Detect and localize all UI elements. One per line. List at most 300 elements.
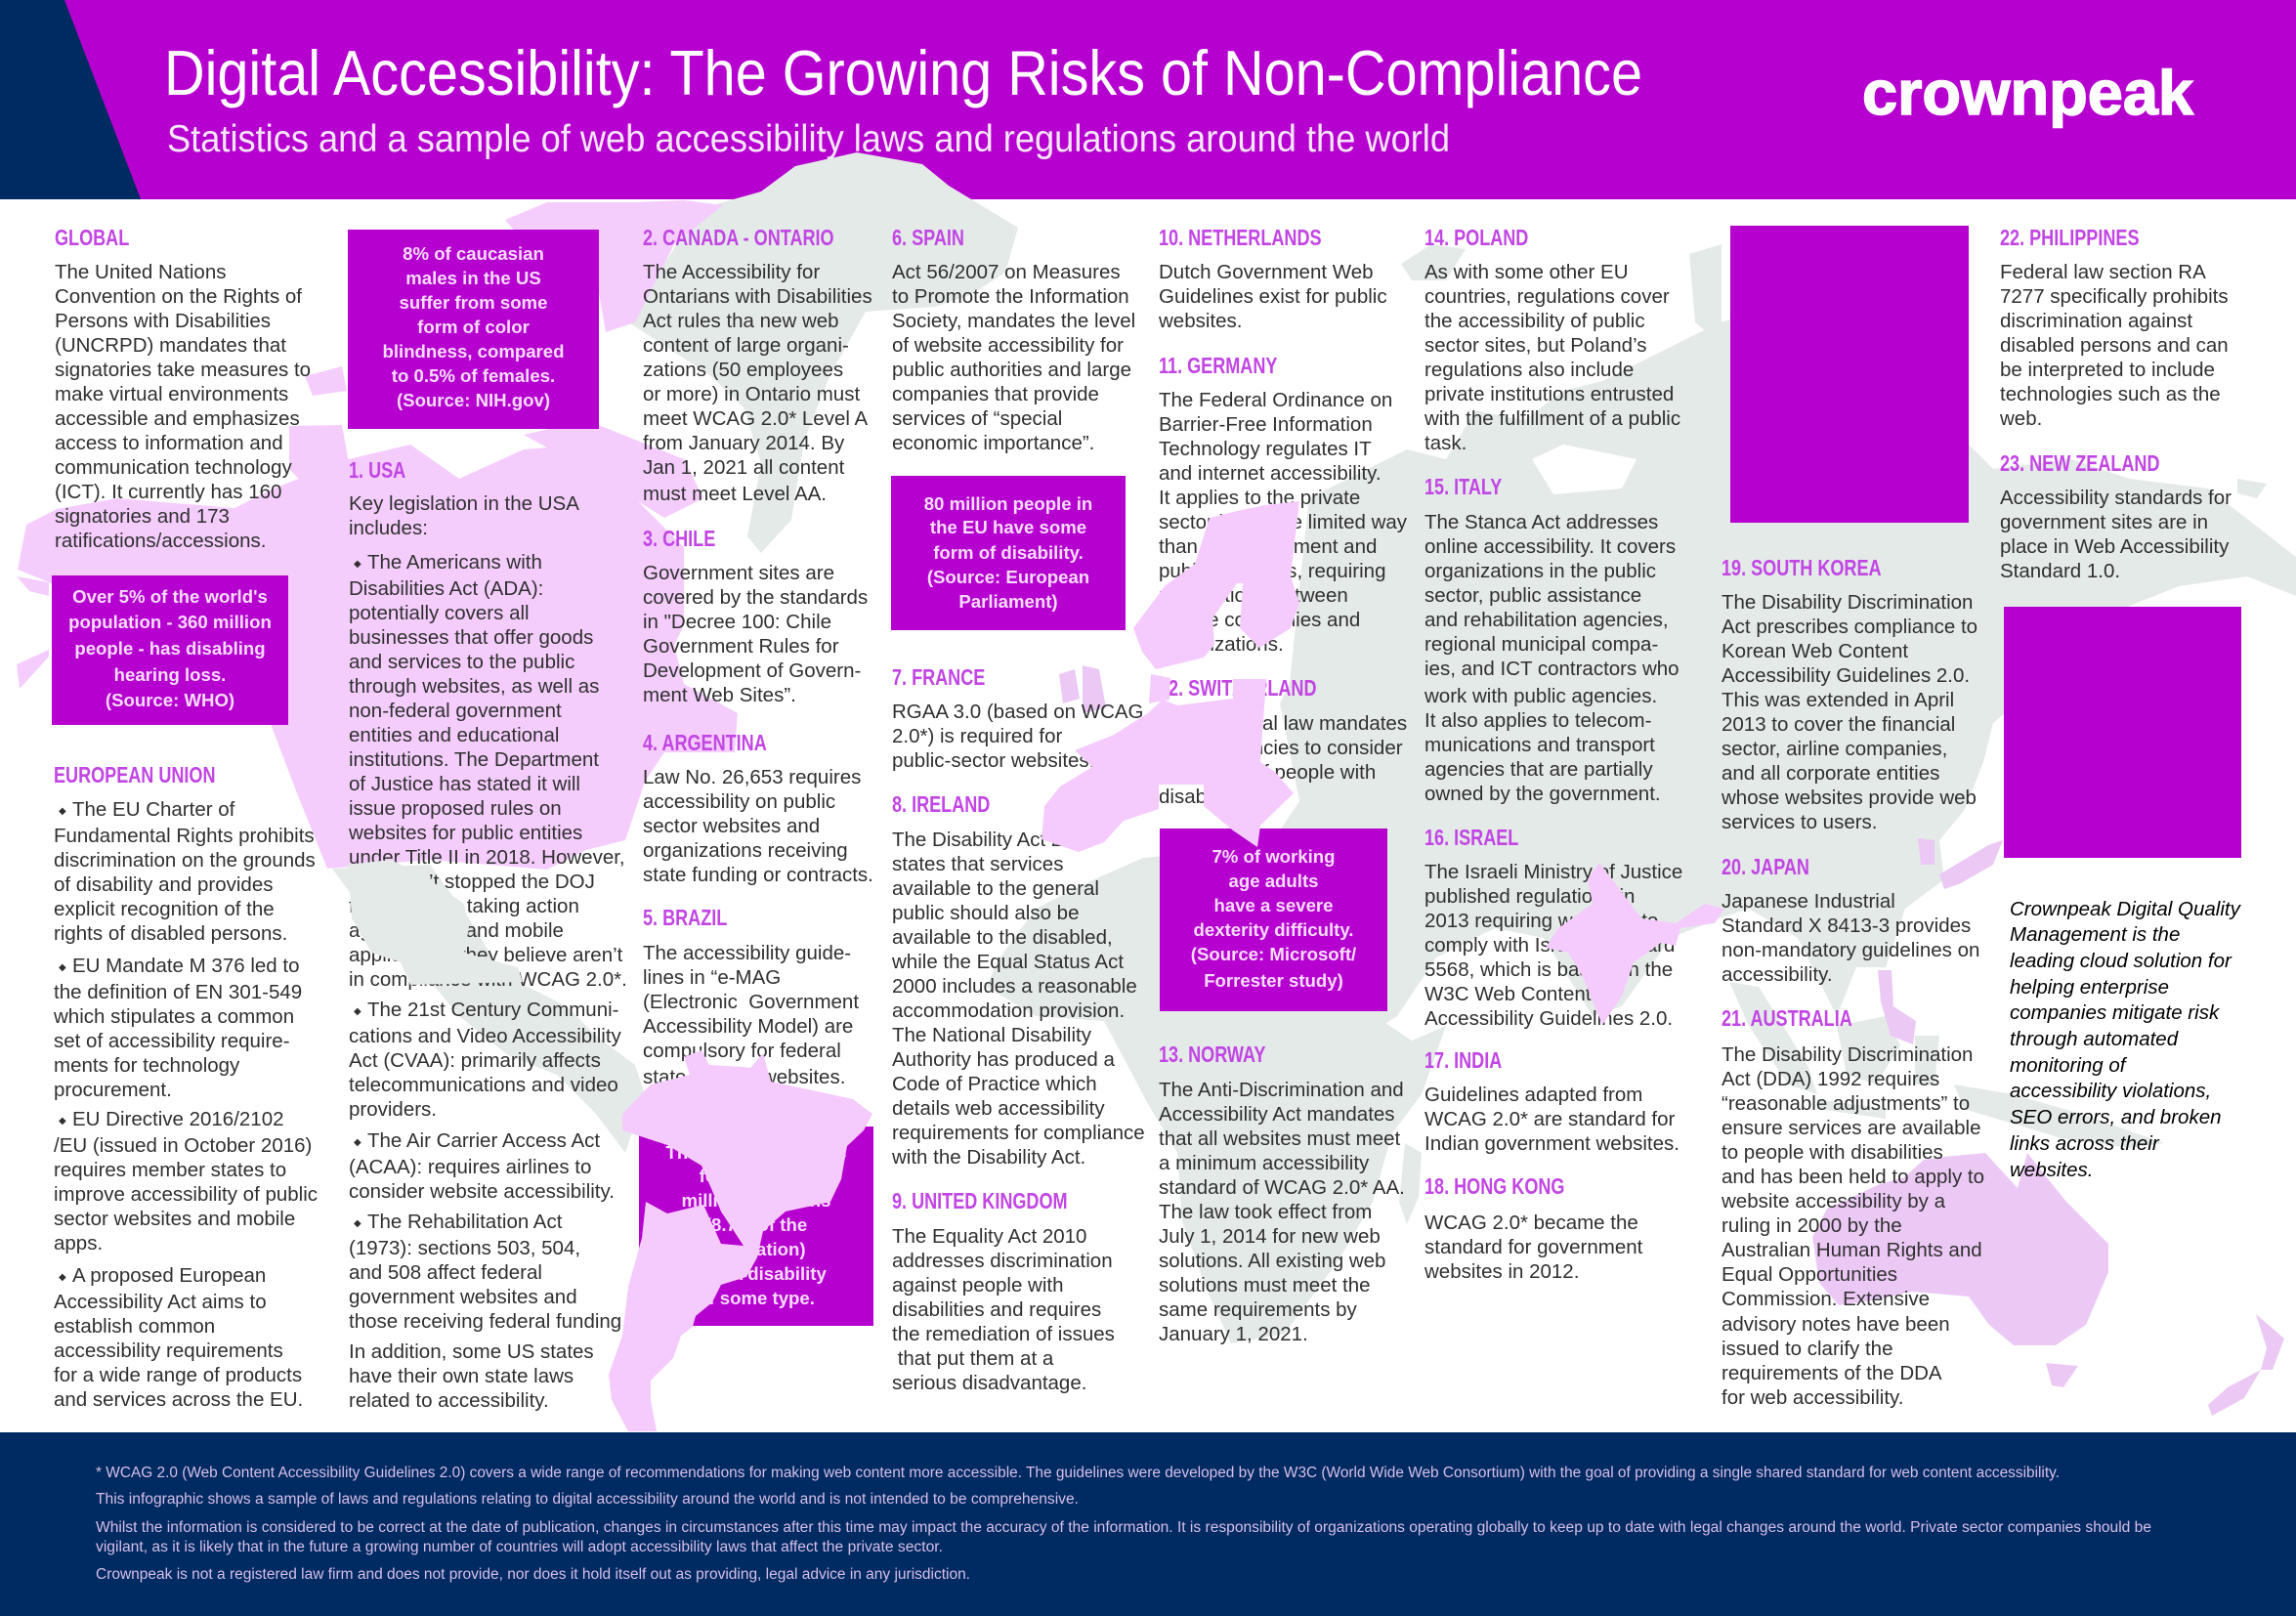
text: Poland: private institutions entrusted — [1424, 383, 1674, 404]
map: Denmark — [1149, 674, 1170, 703]
text: Chile: Development of Govern- — [643, 659, 861, 682]
text: ADA: Disabilities Act (ADA): — [349, 576, 543, 600]
text: Australia — [1722, 1043, 1984, 1409]
text: Philippines: web. — [2000, 406, 2042, 430]
text: global: access to information and — [55, 432, 283, 453]
text: ADA: ◆ — [354, 559, 361, 569]
heading: India: 17. INDIA — [1424, 1047, 1502, 1073]
heading: USA: 1. USA — [349, 457, 405, 483]
heading: Switzerland: 12. SWITZERLAND — [1159, 675, 1317, 701]
text: state laws — [349, 1340, 594, 1411]
text: United Kingdom: against people with — [892, 1274, 1064, 1296]
callout: Brazil disability statistic: found that 24 — [700, 1166, 813, 1186]
text: EU mandate: ◆ — [59, 961, 66, 973]
header band: Digital Accessibility: The Growing Risks of Non-Compliance — [164, 37, 1642, 108]
text: Ireland: available to the disabled, — [892, 926, 1113, 948]
text: Ireland: The Disability Act 2005 — [892, 829, 1096, 850]
text: EU charter: of disability and provides — [54, 873, 274, 895]
map: Scandinavia — [1133, 501, 1299, 669]
heading: Hong Kong: 18. HONG KONG — [1424, 1173, 1564, 1199]
text: ADA: applications they believe aren’t — [349, 944, 622, 965]
text: Germany: The Federal Ordinance on — [1159, 389, 1392, 410]
text: Ireland: 2000 includes a reasonable — [892, 975, 1137, 997]
text: Rehabilitation Act: and 508 affect federal — [349, 1260, 542, 1284]
text: Spain: economic importance”. — [892, 432, 1094, 453]
text: Australia: Equal Opportunities — [1722, 1263, 1897, 1286]
text: Spain: Society, mandates the level — [892, 309, 1135, 332]
text: Switzerland — [1159, 711, 1407, 807]
heading: global: GLOBAL — [55, 225, 129, 250]
text: EU charter: explicit recognition of the — [54, 897, 275, 920]
text: Italy — [1424, 510, 1679, 680]
text: Rehabilitation Act — [349, 1210, 621, 1333]
text: ADA: businesses that offer goods — [349, 625, 593, 649]
text: CVAA: providers. — [349, 1098, 437, 1120]
text: global: accessible and emphasizes — [55, 406, 300, 430]
text: Poland: task. — [1424, 432, 1467, 453]
text: ADA: from actively taking action — [349, 895, 579, 916]
text: Crownpeak note: monitoring of — [2010, 1054, 2126, 1077]
text: Canada — [643, 260, 872, 504]
callout: Brazil disability statistic: of some type. — [698, 1288, 815, 1308]
text: Australia: requirements of the DDA — [1722, 1362, 1942, 1384]
text: global: communication technology — [55, 455, 292, 479]
text: Ireland: Code of Practice which — [892, 1073, 1097, 1094]
text: Australia: for web accessibility. — [1722, 1386, 1903, 1409]
column 7: South Korea, Japan, Australia — [1722, 226, 1984, 1409]
heading: Italy: 15. ITALY — [1424, 474, 1502, 499]
text: Crownpeak note: companies mitigate risk — [2010, 1001, 2219, 1024]
text: ADA: potentially covers all — [349, 602, 530, 623]
column 3: Canada, Chile, Argentina, Brazil — [639, 225, 873, 1326]
text: ADA: issue proposed rules on — [349, 797, 562, 819]
text: Italy: regional municipal compa- — [1424, 633, 1658, 655]
text: Canada: zations (50 employees — [643, 358, 843, 381]
column 5: Netherlands, Germany, Switzerland, Norway — [1159, 225, 1407, 1344]
text: Australia: ruling in 2000 by the — [1722, 1214, 1902, 1237]
text: Hong Kong: WCAG 2.0* became the — [1424, 1212, 1638, 1233]
text: Spain: of website accessibility for — [892, 334, 1124, 356]
callout: color blindness: 8% of caucasian — [403, 243, 544, 264]
text: Italy: organizations in the public — [1424, 559, 1656, 582]
text: Canada: from January 2014. By — [643, 432, 844, 453]
text: ADA: entities and educational — [349, 723, 559, 746]
text: South Korea: and all corporate entities — [1722, 762, 1939, 784]
callout: hearing loss: population - 360 million — [68, 612, 272, 632]
text: Norway: a minimum accessibility — [1159, 1151, 1369, 1174]
callout: hearing loss: (Source: WHO) — [106, 690, 234, 710]
text: Brazil: Accessibility Model) are — [643, 1014, 853, 1038]
heading: Poland: 14. POLAND — [1424, 225, 1528, 250]
text: CVAA: Act (CVAA): primarily affects — [349, 1049, 601, 1071]
heading: South Korea: 19. SOUTH KOREA — [1722, 555, 1882, 580]
text: Germany: organizations. — [1159, 633, 1284, 655]
text: Chile: covered by the standards — [643, 586, 868, 608]
text: EU charter: Fundamental Rights prohibits — [54, 825, 315, 846]
callout: dexterity: Forrester study) — [1204, 970, 1343, 991]
text: India: WCAG 2.0* are standard for — [1424, 1108, 1675, 1129]
text: Netherlands: Dutch Government Web — [1159, 260, 1374, 283]
text: Chile — [643, 561, 868, 705]
heading: European Union: EUROPEAN UNION — [54, 762, 216, 787]
text: France: RGAA 3.0 (based on WCAG — [892, 700, 1144, 723]
callout: color blindness — [348, 230, 599, 429]
text: Canada: must meet Level AA. — [643, 483, 827, 504]
text: Germany: public agencies, requiring — [1159, 559, 1385, 582]
text: global: signatories and 173 — [55, 504, 230, 528]
text: Poland: sector sites, but Poland’s — [1424, 334, 1647, 356]
text: Philippines: 7277 specifically prohibits — [2000, 285, 2229, 307]
callout: hearing loss — [52, 575, 288, 725]
text: Canada: content of large organi- — [643, 334, 849, 356]
text: Hong Kong: standard for government — [1424, 1235, 1642, 1258]
text: Ireland: available to the general — [892, 877, 1099, 899]
text: European Accessibility Act: ◆ — [59, 1272, 66, 1282]
text: South Korea — [1722, 590, 1977, 832]
text: Crownpeak note: SEO errors, and broken — [2010, 1106, 2222, 1128]
text: Ireland: while the Equal Status Act — [892, 950, 1124, 973]
callout: dexterity: dexterity difficulty. — [1194, 919, 1353, 940]
text: France: public-sector websites. — [892, 748, 1094, 772]
text: Canada: Jan 1, 2021 all content — [643, 455, 844, 479]
text: Norway: Accessibility Act mandates — [1159, 1102, 1395, 1126]
text: Crownpeak note: through automated — [2010, 1028, 2178, 1050]
callout: Brazil disability statistic: population) — [706, 1239, 806, 1259]
text: European Accessibility Act: accessibility requirements — [54, 1339, 283, 1362]
text: Australia: issued to clarify the — [1722, 1338, 1892, 1360]
callout: color blindness: males in the US — [405, 268, 541, 288]
footer band: * WCAG 2.0 (Web Content Accessibility Guidelines 2.0) covers a wide range of recommendations for making web content more accessible. The guidelines were developed by the W3C (World Wide Web Consortium) with the goal of providing a single shared standard for web content accessibility. — [96, 1465, 2060, 1481]
heading: United Kingdom: 9. UNITED KINGDOM — [892, 1188, 1068, 1213]
callout: EU disability — [891, 476, 1126, 630]
purple panel: top right — [1730, 226, 1969, 523]
text: EU charter: rights of disabled persons. — [54, 922, 287, 944]
text: ADA: institutions. The Department — [349, 748, 599, 770]
text: New Zealand — [2000, 485, 2232, 582]
text: Ireland: details web accessibility — [892, 1096, 1105, 1120]
text: Israel: Accessibility Guidelines 2.0. — [1424, 1006, 1673, 1030]
text: Italy: and rehabilitation agencies, — [1424, 608, 1669, 631]
callout: Brazil disability statistic: have a disability — [686, 1263, 827, 1284]
text: Switzerland: disabilities. — [1159, 786, 1256, 807]
text: Ireland: states that services — [892, 852, 1063, 875]
map: South America — [609, 1050, 872, 1431]
text: South Korea: whose websites provide web — [1722, 786, 1977, 809]
text: United Kingdom — [892, 1225, 1115, 1393]
text: Spain: services of “special — [892, 406, 1062, 430]
text: CVAA: telecommunications and video — [349, 1073, 618, 1096]
text: Ireland: accommodation provision. — [892, 999, 1125, 1022]
text: Israel: 5568, which is based on the — [1424, 957, 1673, 981]
text: Poland: the accessibility of public — [1424, 309, 1645, 332]
map: North America highlight — [17, 200, 738, 870]
text: Italy continued: agencies that are partially — [1424, 758, 1653, 780]
text: Philippines — [2000, 260, 2229, 430]
text: Norway: solutions must meet the — [1159, 1274, 1370, 1296]
text: CVAA — [349, 999, 621, 1120]
footer band: vigilant, as it is likely that in the future a growing number of countries will adopt accessibility laws that affect the private sector. — [96, 1539, 943, 1555]
text: EU directive: EU Directive 2016/2102 — [72, 1108, 284, 1129]
text: Philippines: Federal law section RA — [2000, 260, 2206, 283]
text: EU mandate: which stipulates a common — [54, 1004, 294, 1028]
text: Philippines: disabled persons and can — [2000, 334, 2229, 356]
text: ADA: of Justice has stated it will — [349, 772, 580, 795]
text: Japan — [1722, 889, 1979, 985]
text: Argentina: accessibility on public — [643, 789, 835, 813]
text: Japan: accessibility. — [1722, 963, 1833, 985]
text: United Kingdom: serious disadvantage. — [892, 1372, 1086, 1393]
text: Crownpeak note: accessibility violations, — [2010, 1080, 2211, 1102]
text: ADA: The Americans with — [367, 551, 542, 573]
text: global: (UNCRPD) mandates that — [55, 334, 286, 356]
heading: Japan: 20. JAPAN — [1722, 854, 1809, 879]
heading: Netherlands: 10. NETHERLANDS — [1159, 225, 1322, 250]
text: Ireland: requirements for compliance — [892, 1122, 1145, 1143]
text: EU mandate: procurement. — [54, 1079, 172, 1100]
text: Netherlands — [1159, 260, 1387, 332]
text: Philippines: technologies such as the — [2000, 383, 2221, 404]
callout: dexterity: 7% of working — [1212, 846, 1336, 867]
callout: EU disability: the EU have some — [930, 517, 1086, 537]
callout: EU disability: Parliament) — [958, 591, 1058, 612]
text: EU mandate: the definition of EN 301-549 — [54, 981, 302, 1002]
text: Norway: January 1, 2021. — [1159, 1323, 1308, 1344]
text: Germany: negotiations between — [1159, 584, 1348, 606]
text: United Kingdom: disabilities and requires — [892, 1297, 1101, 1321]
text: Israel — [1424, 860, 1682, 1030]
text: European Accessibility Act: Accessibility Act aims to — [54, 1290, 267, 1313]
text: Poland: with the fulfillment of a public — [1424, 406, 1680, 430]
text: France: 2.0*) is required for — [892, 725, 1062, 746]
text: Argentina: organizations receiving — [643, 838, 848, 862]
text: Norway: that all websites must meet — [1159, 1127, 1400, 1149]
text: Italy continued: munications and transport — [1424, 733, 1655, 756]
text: EU mandate: ments for technology — [54, 1053, 239, 1077]
text: Canada: Act rules tha new web — [643, 309, 839, 332]
text: Australia: Australian Human Rights and — [1722, 1239, 1982, 1261]
text: USA intro: includes: — [349, 516, 428, 539]
text: ADA: under Title II in 2018. However, — [349, 846, 625, 868]
text: New Zealand: place in Web Accessibility — [2000, 535, 2229, 557]
text: New Zealand: Accessibility standards for — [2000, 487, 2232, 508]
text: Australia: website accessibility by a — [1722, 1190, 1945, 1212]
text: Italy continued: It also applies to telecom- — [1424, 709, 1651, 731]
text: Israel: 2013 requiring websites to — [1424, 909, 1658, 932]
text: ACAA — [349, 1129, 615, 1202]
text: Rehabilitation Act: (1973): sections 503, 504, — [349, 1237, 580, 1258]
text: France — [892, 700, 1144, 772]
text: Ireland: The National Disability — [892, 1024, 1091, 1045]
callout: dexterity: have a severe — [1213, 895, 1333, 915]
text: Germany: Barrier-Free Information — [1159, 412, 1373, 436]
text: Australia: advisory notes have been — [1722, 1313, 1950, 1336]
callout: EU disability: 80 million people in — [924, 493, 1092, 514]
text: EU charter — [54, 797, 316, 944]
header band: Statistics and a sample of web accessibility laws and regulations around the world — [167, 118, 1450, 160]
text: EU mandate — [54, 954, 302, 1100]
text: Italy continued: work with public agencies. — [1424, 684, 1657, 707]
text: Germany — [1159, 389, 1407, 655]
callout: dexterity — [1160, 829, 1387, 1011]
text: Canada: meet WCAG 2.0* Level A — [643, 406, 868, 430]
text: Crownpeak note: leading cloud solution for — [2010, 950, 2232, 972]
text: Australia: “reasonable adjustments” to — [1722, 1092, 1970, 1115]
text: Argentina: sector websites and — [643, 815, 820, 836]
text: Poland: countries, regulations cover — [1424, 285, 1670, 307]
text: state laws: In addition, some US states — [349, 1340, 594, 1362]
text: Norway: standard of WCAG 2.0* AA. — [1159, 1176, 1405, 1198]
heading: Chile: 3. CHILE — [643, 526, 715, 551]
heading: New Zealand: 23. NEW ZEALAND — [2000, 450, 2160, 476]
text: South Korea: The Disability Discrimination — [1722, 590, 1973, 614]
text: Argentina: state funding or contracts. — [643, 864, 873, 885]
text: EU directive — [54, 1108, 318, 1255]
text: ADA: in compliance with WCAG 2.0*. — [349, 967, 627, 991]
header band: crownpeak — [1862, 58, 2193, 128]
text: Ireland — [892, 829, 1145, 1169]
purple panel: lower right — [2004, 607, 2241, 858]
text: Australia: The Disability Discrimination — [1722, 1043, 1973, 1065]
header band — [0, 0, 2296, 199]
text: Spain: public authorities and large — [892, 358, 1131, 381]
text: Chile: Government sites are — [643, 561, 834, 584]
text: Canada: Ontarians with Disabilities — [643, 285, 872, 307]
text: Germany: private companies and — [1159, 608, 1360, 631]
text: ACAA: consider website accessibility. — [349, 1180, 615, 1202]
text: Ireland: public should also be — [892, 901, 1079, 924]
callout: EU disability: (Source: European — [927, 567, 1089, 587]
text: Netherlands: Guidelines exist for public — [1159, 285, 1387, 307]
text: Spain: to Promote the Information — [892, 285, 1129, 307]
text: Netherlands: websites. — [1159, 309, 1242, 332]
text: Switzerland: Swiss federal law mandates — [1159, 711, 1407, 735]
text: Hong Kong — [1424, 1212, 1643, 1282]
text: United Kingdom: The Equality Act 2010 — [892, 1225, 1086, 1247]
text: EU directive: /EU (issued in October 2016) — [54, 1133, 312, 1157]
text: Ireland: Authority has produced a — [892, 1047, 1115, 1071]
text: Brazil — [643, 942, 859, 1088]
text: India: Guidelines adapted from — [1424, 1083, 1642, 1106]
text: Poland: regulations also include — [1424, 358, 1634, 381]
footer band: Whilst the information is considered to be correct at the date of publication, changes in circumstances after this time may impact the accuracy of the information. It is responsibility of organizations operating globally to keep up to date with legal changes around the world. Private sector companies should be — [96, 1519, 2151, 1536]
callout: color blindness: suffer from some — [400, 292, 547, 313]
text: ACAA: The Air Carrier Access Act — [367, 1129, 600, 1151]
map: India — [1546, 863, 1724, 1025]
text: Chile: in "Decree 100: Chile — [643, 610, 831, 633]
text: Poland — [1424, 260, 1680, 453]
callout: color blindness: blindness, compared — [383, 341, 564, 361]
text: Germany: sector in a more limited way — [1159, 510, 1407, 533]
callout: hearing loss: hearing loss. — [114, 664, 226, 685]
callout: Brazil disability statistic — [639, 1127, 873, 1326]
text: USA intro — [349, 492, 579, 539]
text: Argentina — [643, 766, 873, 885]
text: South Korea: 2013 to cover the financial — [1722, 713, 1955, 735]
text: European Accessibility Act: for a wide range of products — [54, 1364, 302, 1385]
callout: hearing loss: Over 5% of the world's — [72, 586, 268, 607]
text: Norway: same requirements by — [1159, 1297, 1357, 1321]
callout: Brazil disability statistic: The Brazilian census — [666, 1142, 846, 1163]
text: European Accessibility Act: establish common — [54, 1315, 215, 1337]
text: Australia: Act (DDA) 1992 requires — [1722, 1068, 1939, 1090]
text: EU charter: ◆ — [59, 805, 66, 817]
map: Asia Pacific highlights — [1059, 665, 2284, 1416]
map: continental Europe — [1042, 679, 1294, 852]
text: Norway: solutions. All existing web — [1159, 1249, 1385, 1272]
text: Israel: published regulations in — [1424, 885, 1635, 907]
text: CVAA: ◆ — [354, 1006, 361, 1016]
text: Brazil: state agency websites. — [643, 1065, 845, 1088]
text: Australia: ensure services are available — [1722, 1117, 1981, 1139]
text: Spain: Act 56/2007 on Measures — [892, 260, 1121, 283]
text: ADA: and services to the public — [349, 651, 574, 672]
text: Norway: July 1, 2014 for new web — [1159, 1225, 1381, 1247]
text: Italy continued: owned by the government. — [1424, 782, 1661, 805]
text: global: make virtual environments — [55, 383, 288, 404]
text: EU directive: requires member states to — [54, 1159, 286, 1180]
text: Germany: It applies to the private — [1159, 487, 1360, 508]
text: United Kingdom: addresses discrimination — [892, 1249, 1113, 1272]
text: South Korea: Act prescribes compliance to — [1722, 616, 1977, 637]
text: global: (ICT). It currently has 160 — [55, 481, 281, 502]
text: EU charter: The EU Charter of — [72, 797, 234, 821]
text: global: Convention on the Rights of — [55, 285, 302, 307]
text: Chile: ment Web Sites”. — [643, 684, 796, 705]
column 4: Spain, France, Ireland, UK — [891, 225, 1145, 1393]
text: ADA: through websites, as well as — [349, 674, 599, 698]
callout: hearing loss: people - has disabling — [74, 638, 266, 659]
footer band: Crownpeak is not a registered law firm and does not provide, nor does it hold itself out as providing, legal advice in any jurisdiction. — [96, 1566, 970, 1583]
text: ADA: this hasn’t stopped the DOJ — [349, 870, 595, 893]
text: Argentina: Law No. 26,653 requires — [643, 766, 861, 787]
text: Crownpeak note: helping enterprise — [2010, 976, 2169, 999]
text: state laws: related to accessibility. — [349, 1389, 549, 1411]
text: South Korea: Accessibility Guidelines 2.0. — [1722, 664, 1970, 686]
text: EU mandate: set of accessibility require- — [54, 1030, 290, 1051]
text: Crownpeak note: links across their — [2010, 1132, 2159, 1155]
text: Philippines: discrimination against — [2000, 309, 2192, 332]
text: Canada: The Accessibility for — [643, 260, 820, 283]
text: Israel: comply with Israeli Standard — [1424, 934, 1675, 956]
text: EU mandate: EU Mandate M 376 led to — [72, 954, 299, 977]
text: Japan: Standard X 8413-3 provides — [1722, 914, 1971, 936]
text: Japan: non-mandatory guidelines on — [1722, 938, 1979, 961]
heading: Australia: 21. AUSTRALIA — [1722, 1005, 1852, 1031]
text: European Accessibility Act: and services across the EU. — [54, 1387, 303, 1411]
text: global — [55, 260, 311, 551]
text: ACAA: ◆ — [354, 1137, 361, 1147]
heading: Brazil: 5. BRAZIL — [643, 905, 727, 930]
text: Norway: The law took effect from — [1159, 1200, 1372, 1223]
callout: color blindness: (Source: NIH.gov) — [397, 390, 550, 410]
callout: Brazil disability statistic: (8.7% of the — [705, 1214, 807, 1235]
text: South Korea: sector, airline companies, — [1722, 737, 1947, 760]
text: Crownpeak note: Management is the — [2010, 923, 2180, 946]
text: Rehabilitation Act: government websites and — [349, 1286, 577, 1307]
text: global: ratifications/accessions. — [55, 530, 266, 551]
text: Philippines: be interpreted to include — [2000, 358, 2215, 381]
text: Rehabilitation Act: ◆ — [354, 1217, 361, 1229]
text: CVAA: The 21st Century Communi- — [367, 999, 618, 1020]
heading: France: 7. FRANCE — [892, 664, 985, 690]
text: Germany: and internet accessibility. — [1159, 461, 1382, 485]
text: Chile: Government Rules for — [643, 635, 839, 657]
text: Australia: to people with disabilities — [1722, 1141, 1943, 1164]
callout: Brazil disability statistic: million Brazilians — [682, 1190, 830, 1211]
text: European Accessibility Act — [54, 1264, 303, 1411]
footer band — [0, 1432, 2296, 1616]
heading: Germany: 11. GERMANY — [1159, 353, 1277, 378]
